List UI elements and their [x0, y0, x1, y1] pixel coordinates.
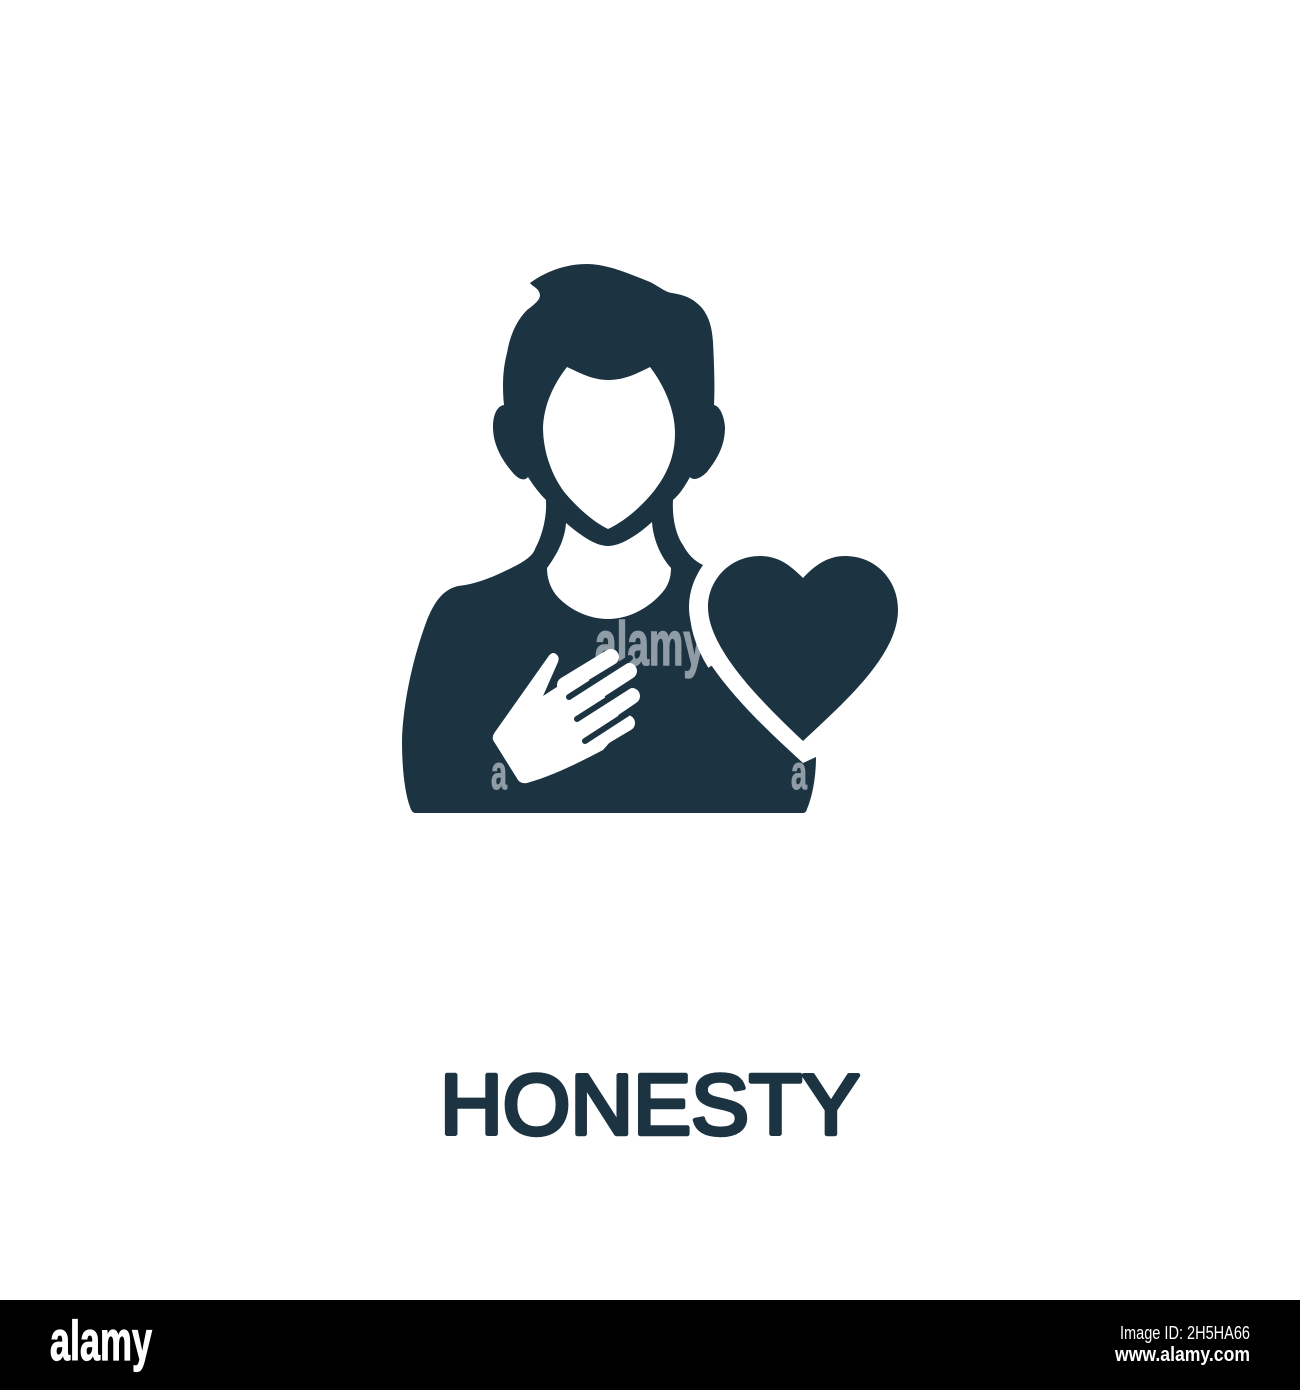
title: HONESTY: HONESTY — [440, 1058, 860, 1153]
watermark: left a: a — [491, 747, 507, 800]
face cutout — [543, 367, 675, 529]
footer logo: alamy: alamy — [50, 1309, 152, 1372]
watermark: right a: a — [791, 747, 807, 800]
icon: heart — [708, 556, 898, 741]
neck cutout — [547, 522, 671, 619]
watermark: alamy: alamy — [595, 610, 705, 679]
footer image id: Image ID: 2H5HA66 — [1120, 1323, 1250, 1343]
person silhouette — [402, 264, 816, 813]
icon: honest person with hand on chest and heart — [402, 264, 898, 813]
footer website: www.alamy.com — [1114, 1344, 1250, 1366]
icon: hand on chest — [493, 653, 646, 783]
footer bar — [0, 1300, 1300, 1390]
